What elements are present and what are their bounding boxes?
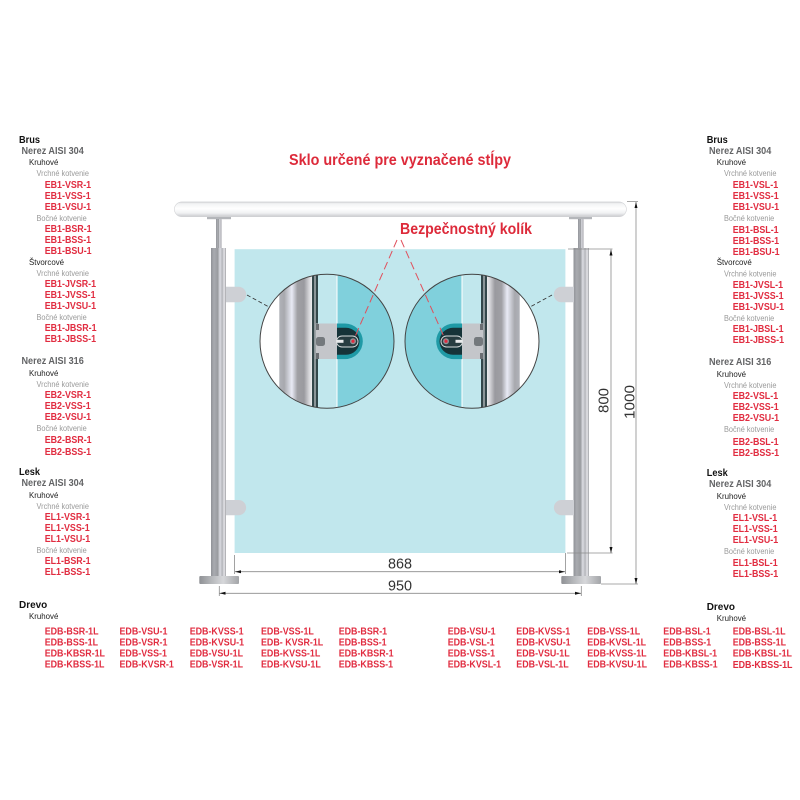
codes: EB2 side: EB2-BSR-1 xyxy=(45,435,92,446)
codes: EB2 top: EB2-VSR-1 xyxy=(45,390,91,401)
codes: EB2 top xyxy=(45,390,91,423)
dimension: 800: 800 xyxy=(596,388,612,413)
codes: wood right column 2: EDB-KVSU-1 xyxy=(516,637,571,649)
codes: EB1 side round xyxy=(45,224,92,257)
codes: wood right column 2: EDB-VSL-1L xyxy=(516,659,569,671)
codes: wood right column 1: EDB-VSS-1 xyxy=(448,648,495,660)
codes: EB1 side round right xyxy=(733,225,780,258)
codes: EB2 top: EB2-VSU-1 xyxy=(45,412,91,423)
codes: EB2 side right xyxy=(733,437,779,459)
codes: EB1 top square: EB1-JVSR-1 xyxy=(45,279,96,290)
codes: wood column 5 xyxy=(339,626,394,671)
codes: wood right column 4 xyxy=(663,626,718,671)
label: Bočné kotvenie right: Bočné kotvenie xyxy=(724,214,774,223)
codes: wood column 5: EDB-KBSS-1 xyxy=(339,659,393,671)
codes: wood column 4: EDB-VSS-1L xyxy=(261,626,314,638)
label: Bočné kotvenie gloss right: Bočné kotvenie xyxy=(724,547,774,556)
codes: wood right column 2: EDB-VSU-1L xyxy=(516,648,570,660)
label: Štvorcové: Štvorcové xyxy=(29,257,64,267)
codes: EB2 top right: EB2-VSU-1 xyxy=(733,413,779,424)
heading: Brus: Brus xyxy=(19,135,40,146)
codes: EB2 side right: EB2-BSS-1 xyxy=(733,448,779,459)
codes: EB1 side square: EB1-JBSR-1 xyxy=(45,323,97,334)
subheading: Nerez AISI 316 right: Nerez AISI 316 xyxy=(709,357,771,368)
codes: wood right column 3: EDB-KVSU-1L xyxy=(587,659,647,671)
label: Kruhové: Kruhové xyxy=(29,158,59,167)
codes: wood column 4 xyxy=(261,626,323,671)
label: Bočné kotvenie gloss: Bočné kotvenie xyxy=(36,546,87,555)
label: Vrchné kotvenie square: Vrchné kotvenie xyxy=(36,269,89,278)
codes: wood column 2 xyxy=(120,626,174,671)
codes: wood column 1 xyxy=(45,626,105,671)
dashed leaders to detail circles xyxy=(247,295,552,307)
label: Vrchné kotvenie square right: Vrchné kotvenie xyxy=(724,269,776,279)
codes: wood column 1: EDB-KBSS-1L xyxy=(45,659,105,671)
label: Kruhové wood: Kruhové xyxy=(29,612,59,621)
codes: EL1 top: EL1-VSR-1 xyxy=(45,512,90,523)
codes: wood column 3 xyxy=(190,626,244,671)
codes: wood right column 5: EDB-BSL-1L xyxy=(733,626,786,638)
codes: wood column 2: EDB-VSR-1 xyxy=(120,637,167,649)
codes: EB1 top round right: EB1-VSS-1 xyxy=(733,191,779,202)
codes: EB1 top round: EB1-VSU-1 xyxy=(45,202,91,213)
codes: EL1 side right: EL1-BSS-1 xyxy=(733,569,778,580)
subheading: Nerez AISI 304: Nerez AISI 304 xyxy=(22,146,84,157)
label: Vrchné kotvenie gloss right: Vrchné kotvenie xyxy=(724,503,776,512)
dimension: 868: 868 xyxy=(388,556,412,572)
label: Kruhové 316 right: Kruhové xyxy=(717,370,746,379)
codes: wood column 2: EDB-VSS-1 xyxy=(120,648,167,660)
codes: wood right column 5: EDB-KBSL-1L xyxy=(733,648,792,660)
subheading: Nerez AISI 304 gloss right: Nerez AISI 304 xyxy=(709,479,772,490)
heading: Drevo: Drevo xyxy=(19,600,47,611)
codes: EB2 side right: EB2-BSL-1 xyxy=(733,437,779,448)
codes: EB1 top round: EB1-VSS-1 xyxy=(45,191,91,202)
codes: EB1 side round right: EB1-BSS-1 xyxy=(733,236,779,247)
dimension: 950: 950 xyxy=(388,578,412,594)
codes: EB1 side square right xyxy=(733,324,784,346)
label: Bočné kotvenie 316: Bočné kotvenie xyxy=(36,424,87,433)
panel: wood codes left xyxy=(19,600,394,671)
dimension: 868 xyxy=(234,553,565,574)
codes: wood column 5: EDB-BSS-1 xyxy=(339,637,387,649)
label: Vrchné kotvenie gloss: Vrchné kotvenie xyxy=(36,502,89,511)
label: Bočné kotvenie square: Bočné kotvenie xyxy=(36,313,87,322)
panel: wood codes right xyxy=(448,602,793,671)
codes: wood column 3: EDB-KVSS-1 xyxy=(190,626,244,638)
label: Bočné kotvenie 316 right: Bočné kotvenie xyxy=(724,425,774,434)
panel: right product list xyxy=(707,135,784,580)
codes: wood right column 1: EDB-KVSL-1 xyxy=(448,659,501,671)
codes: EB1 top square: EB1-JVSS-1 xyxy=(45,290,96,301)
label: Vrchné kotvenie right: Vrchné kotvenie xyxy=(724,169,776,178)
codes: wood column 5: EDB-KBSR-1 xyxy=(339,648,394,660)
label: Kruhové 316: Kruhové xyxy=(29,369,59,378)
codes: wood right column 5: EDB-KBSS-1L xyxy=(733,660,793,671)
codes: wood right column 2: EDB-KVSS-1 xyxy=(516,626,570,638)
codes: EB1 side square: EB1-JBSS-1 xyxy=(45,334,96,345)
codes: EB1 top square right: EB1-JVSU-1 xyxy=(733,302,784,313)
codes: wood right column 4: EDB-KBSS-1 xyxy=(663,659,718,671)
label: Kruhové right: Kruhové xyxy=(717,158,746,167)
dimension: 800 xyxy=(567,249,612,553)
codes: wood right column 1 xyxy=(448,626,501,671)
codes: wood column 1: EDB-KBSR-1L xyxy=(45,648,105,660)
codes: wood column 5: EDB-BSR-1 xyxy=(339,626,387,638)
label: Vrchné kotvenie 316 right: Vrchné kotvenie xyxy=(724,381,776,390)
codes: wood right column 3 xyxy=(587,626,647,671)
label: Štvorcové right: Štvorcové xyxy=(717,257,752,267)
codes: wood right column 1: EDB-VSL-1 xyxy=(448,637,495,649)
codes: wood right column 3: EDB-KVSL-1L xyxy=(587,637,646,649)
codes: wood column 3: EDB-KVSU-1 xyxy=(190,637,244,649)
glass panel xyxy=(235,249,565,553)
codes: EL1 top right: EL1-VSS-1 xyxy=(733,524,778,535)
codes: EB1 top square xyxy=(45,279,96,312)
codes: EL1 top right: EL1-VSU-1 xyxy=(733,535,778,546)
codes: EB1 top round right: EB1-VSU-1 xyxy=(733,202,779,213)
codes: EB1 side round: EB1-BSR-1 xyxy=(45,224,92,235)
codes: EB1 top square right: EB1-JVSL-1 xyxy=(733,280,783,291)
codes: EB2 top: EB2-VSS-1 xyxy=(45,401,91,412)
codes: EL1 side: EL1-BSR-1 xyxy=(45,556,91,567)
codes: wood column 3: EDB-VSU-1L xyxy=(190,648,243,660)
heading: Lesk right: Lesk xyxy=(707,468,728,479)
codes: EB1 side round right: EB1-BSU-1 xyxy=(733,247,780,258)
codes: EB1 side round: EB1-BSS-1 xyxy=(45,235,91,246)
codes: EB1 side square right: EB1-JBSL-1 xyxy=(733,324,784,335)
codes: EL1 top: EL1-VSU-1 xyxy=(45,534,90,545)
title: Sklo určené pre vyznačené stĺpy xyxy=(289,149,511,169)
handrail xyxy=(174,202,626,217)
subheading: Nerez AISI 304 right: Nerez AISI 304 xyxy=(709,146,772,157)
codes: EB1 side round: EB1-BSU-1 xyxy=(45,246,92,257)
callout leaders: safety pin xyxy=(351,240,448,343)
codes: EL1 side right xyxy=(733,558,778,580)
codes: EB2 top right: EB2-VSS-1 xyxy=(733,402,779,413)
heading: Lesk: Lesk xyxy=(19,467,41,478)
codes: EB1 side square right: EB1-JBSS-1 xyxy=(733,335,784,346)
codes: EB1 top round right: EB1-VSL-1 xyxy=(733,180,778,191)
codes: EB1 side square xyxy=(45,323,97,345)
label: Vrchné kotvenie: Vrchné kotvenie xyxy=(36,169,89,178)
codes: wood column 2: EDB-KVSR-1 xyxy=(120,659,174,671)
codes: wood right column 5: EDB-BSS-1L xyxy=(733,637,786,649)
codes: wood right column 4: EDB-KBSL-1 xyxy=(663,648,717,660)
codes: EB2 top right xyxy=(733,391,779,424)
label: Kruhové gloss: Kruhové xyxy=(29,491,59,500)
glass clips xyxy=(226,287,574,515)
dimension: 950 xyxy=(219,578,581,596)
codes: EL1 side: EL1-BSS-1 xyxy=(45,567,90,578)
label: Kruhové gloss right: Kruhové xyxy=(717,492,746,501)
dimension: 1000: 1000 xyxy=(622,385,638,419)
codes: EB1 top round right xyxy=(733,180,779,213)
right railing post xyxy=(561,217,601,584)
codes: wood right column 2 xyxy=(516,626,571,671)
subheading: Nerez AISI 316: Nerez AISI 316 xyxy=(22,356,84,367)
left railing post xyxy=(199,217,239,584)
codes: wood column 4: EDB-KVSU-1L xyxy=(261,659,321,671)
codes: wood column 3: EDB-VSR-1L xyxy=(190,659,243,671)
label: Bočné kotvenie: Bočné kotvenie xyxy=(36,214,87,223)
codes: EB1 side round right: EB1-BSL-1 xyxy=(733,225,779,236)
codes: wood column 1: EDB-BSR-1L xyxy=(45,626,99,638)
codes: EL1 top: EL1-VSS-1 xyxy=(45,523,90,534)
codes: wood right column 4: EDB-BSS-1 xyxy=(663,637,711,649)
callout label: safety pin: Bezpečnostný kolík xyxy=(400,221,532,238)
codes: wood column 4: EDB- KVSR-1L xyxy=(261,637,323,649)
codes: EL1 top xyxy=(45,512,90,545)
codes: wood right column 3: EDB-KVSS-1L xyxy=(587,648,647,660)
codes: EB1 top square right: EB1-JVSS-1 xyxy=(733,291,784,302)
codes: EL1 side xyxy=(45,556,91,578)
label: Bočné kotvenie square right: Bočné kotvenie xyxy=(724,314,774,323)
dimension: 1000 xyxy=(601,202,638,584)
codes: EL1 top right: EL1-VSL-1 xyxy=(733,513,777,524)
codes: wood right column 4: EDB-BSL-1 xyxy=(663,626,711,638)
codes: wood column 4: EDB-KVSS-1L xyxy=(261,648,320,660)
codes: wood column 1: EDB-BSS-1L xyxy=(45,637,98,649)
codes: wood right column 1: EDB-VSU-1 xyxy=(448,626,496,638)
codes: EB1 top square right xyxy=(733,280,784,313)
detail circle left xyxy=(260,270,397,415)
codes: EB1 top round xyxy=(45,180,91,213)
codes: EL1 top right xyxy=(733,513,778,546)
label: Vrchné kotvenie 316: Vrchné kotvenie xyxy=(36,380,89,389)
codes: EB1 top round: EB1-VSR-1 xyxy=(45,180,91,191)
codes: wood right column 5 xyxy=(733,626,793,671)
codes: EB2 side: EB2-BSS-1 xyxy=(45,447,91,458)
codes: EB2 side xyxy=(45,435,92,458)
codes: wood column 2: EDB-VSU-1 xyxy=(120,626,167,638)
codes: wood right column 3: EDB-VSS-1L xyxy=(587,626,640,638)
subheading: Nerez AISI 304 gloss: Nerez AISI 304 xyxy=(22,478,84,489)
panel: left product list xyxy=(19,135,97,578)
detail circle right xyxy=(402,270,539,415)
codes: EL1 side right: EL1-BSL-1 xyxy=(733,558,778,569)
label: Kruhové wood right: Kruhové xyxy=(717,614,746,623)
heading: Brus right: Brus xyxy=(707,135,728,146)
heading: Drevo right: Drevo xyxy=(707,602,735,613)
codes: EB2 top right: EB2-VSL-1 xyxy=(733,391,778,402)
codes: EB1 top square: EB1-JVSU-1 xyxy=(45,301,96,312)
